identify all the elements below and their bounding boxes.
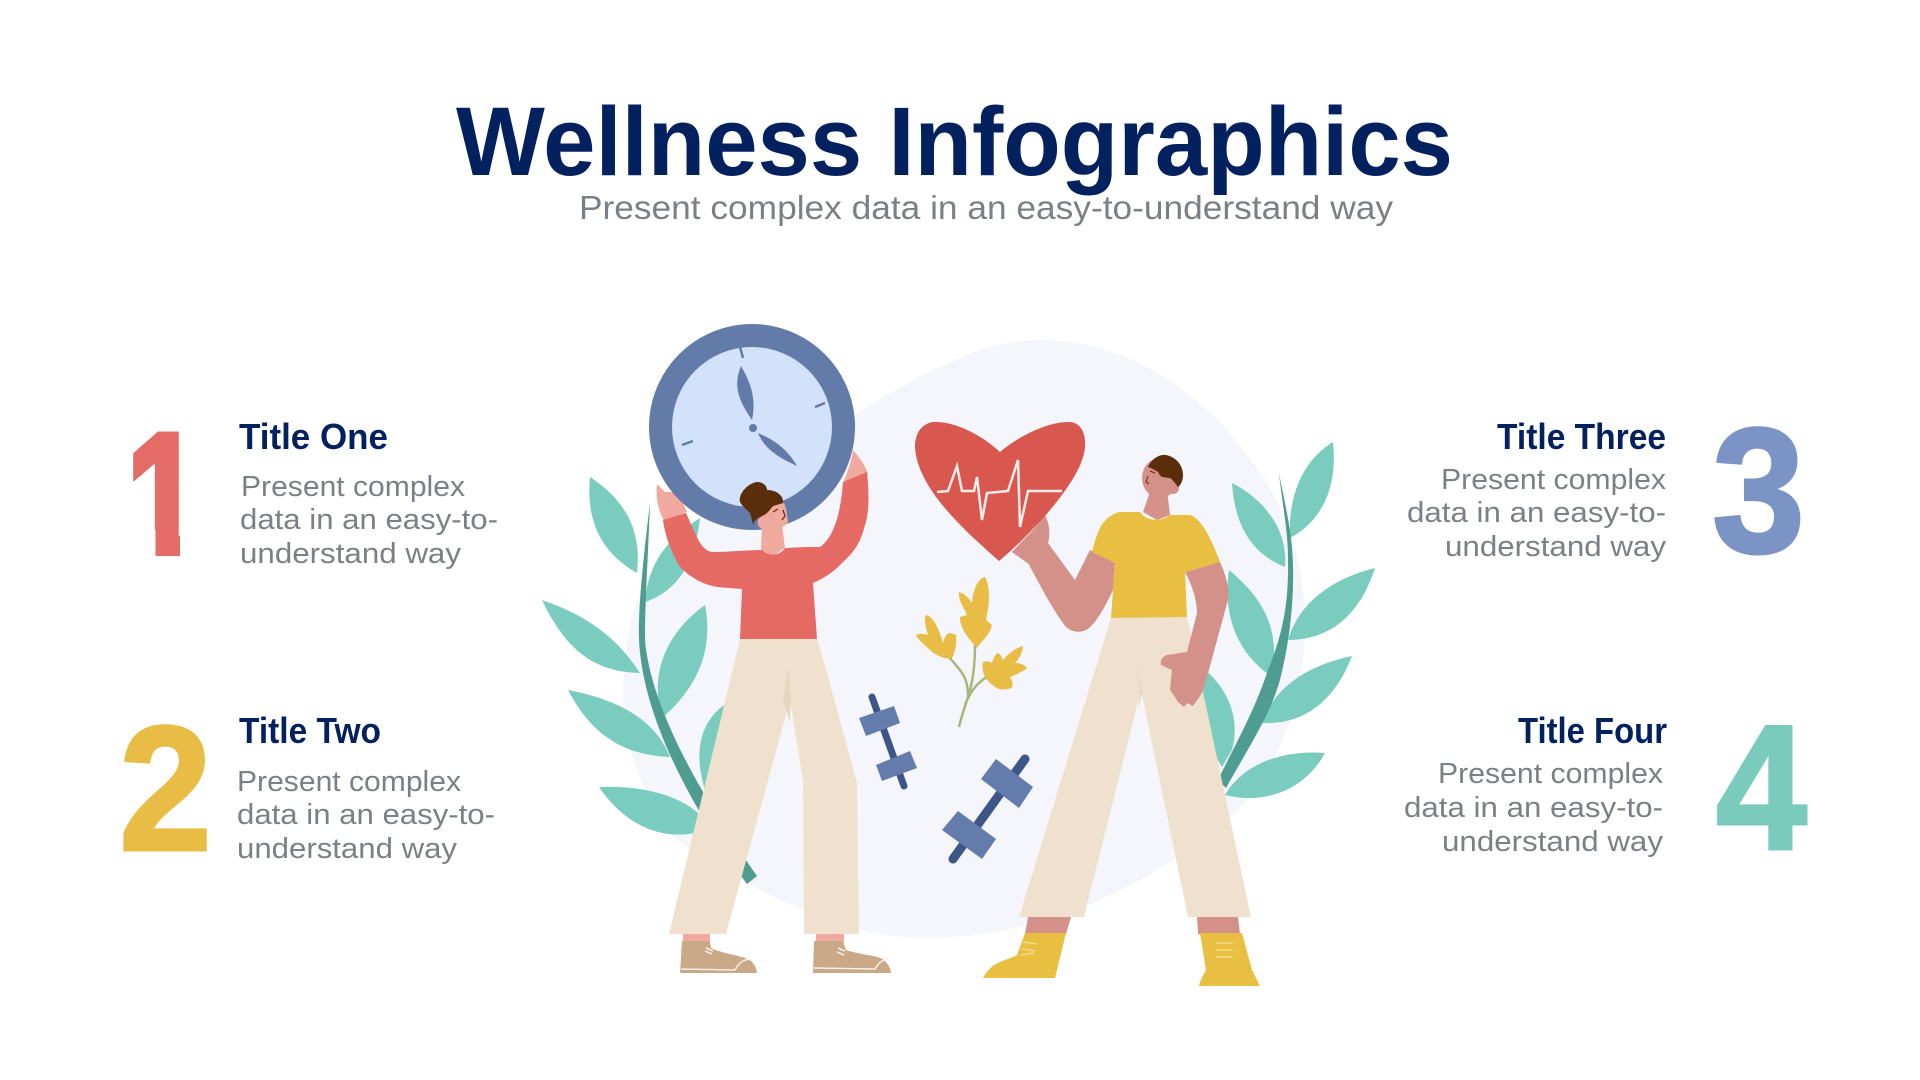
title: Wellness Infographics (456, 87, 1453, 196)
text block: item two description: Present complex (237, 766, 462, 798)
text block: item one description (240, 471, 498, 570)
neck (761, 525, 785, 556)
number 2: 2 (119, 689, 212, 888)
text block: item two description (237, 766, 495, 865)
heading: title three: Title Three (1497, 416, 1666, 457)
thumb (1012, 515, 1049, 565)
heading: title four: Title Four (1518, 710, 1667, 751)
text block: item three description: data in an easy-to- (1407, 497, 1666, 529)
heading: title two: Title Two (239, 710, 381, 751)
icon: heart (915, 422, 1085, 561)
right arm (1161, 562, 1229, 707)
trouser shadow (1136, 658, 1142, 710)
number 3: 3 (1712, 391, 1805, 590)
figure: man holding heart (915, 422, 1260, 986)
subtitle: Present complex data in an easy-to-understand way (579, 189, 1394, 226)
central illustration (542, 324, 1375, 986)
trousers (669, 639, 859, 934)
text block: item three description: Present complex (1441, 464, 1667, 496)
head (740, 482, 788, 529)
trouser shadow (783, 667, 791, 722)
right plant (1202, 442, 1375, 798)
text block: item one description: understand way (240, 538, 462, 570)
text block: item four description (1404, 758, 1664, 858)
text block: item four description: understand way (1442, 826, 1664, 858)
icon: large dumbbell (942, 759, 1033, 859)
text block: item one description: Present complex (241, 471, 466, 503)
panel: item one (133, 422, 497, 569)
text block: item two description: data in an easy-to- (237, 799, 495, 831)
icon: clock (649, 324, 855, 530)
heading: title one: Title One (239, 416, 388, 457)
text block: item three description: understand way (1445, 531, 1667, 563)
t-shirt (1092, 512, 1220, 618)
hands (657, 450, 868, 522)
shoes (680, 941, 891, 973)
background blob (623, 340, 1305, 938)
ankles (683, 934, 844, 942)
small yellow plant (916, 577, 1027, 727)
trousers (1019, 617, 1251, 917)
text block: item one description: data in an easy-to- (240, 504, 498, 536)
raised arm (1012, 515, 1115, 632)
number 1: 1 (127, 397, 200, 596)
boot laces (1021, 942, 1233, 957)
shoe details (681, 948, 888, 970)
boots (983, 933, 1260, 986)
text block: item four description: Present complex (1438, 758, 1664, 790)
panel: item four (1404, 688, 1807, 887)
head (1142, 455, 1183, 498)
ankles (1025, 917, 1240, 934)
figure: woman holding clock (649, 324, 891, 973)
text block: item four description: data in an easy-to- (1404, 792, 1663, 824)
icon: small dumbbell (859, 697, 917, 786)
number 4: 4 (1716, 688, 1807, 887)
neck (1143, 490, 1170, 520)
panel: item two (119, 689, 495, 888)
text block: item three description (1407, 464, 1667, 563)
panel: item three (1407, 391, 1805, 590)
sweater (663, 472, 868, 639)
text block: item two description: understand way (237, 833, 458, 865)
left plant (542, 477, 757, 884)
